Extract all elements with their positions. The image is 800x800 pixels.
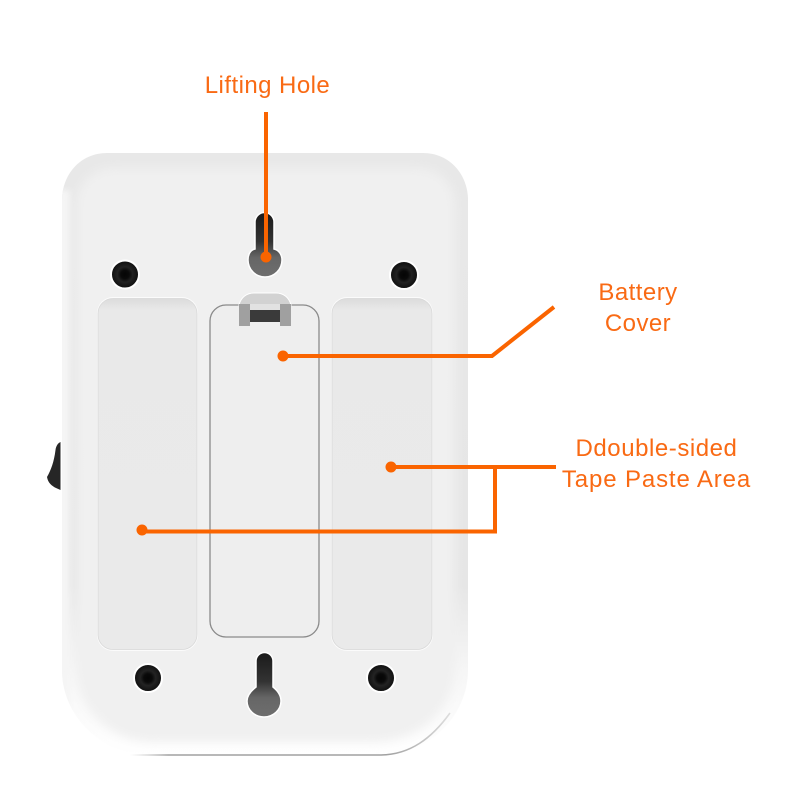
side switch (47, 442, 60, 490)
label: battery cover: Cover (605, 310, 671, 337)
screw hole: top right (390, 261, 418, 289)
label: battery cover: Battery (598, 279, 678, 306)
leader: lifting hole (260, 112, 272, 262)
device body (62, 153, 468, 756)
battery cover latch (239, 293, 291, 326)
infographic canvas (47, 76, 750, 756)
bottom keyhole (247, 652, 281, 717)
screw hole: bottom right (367, 664, 395, 692)
label: double-sided tape paste area: Ddouble-sided (576, 435, 737, 462)
screw hole: bottom left (134, 664, 162, 692)
label: double-sided tape paste area: Tape Paste Area (562, 466, 751, 493)
leader: battery cover (278, 307, 554, 362)
left tape area (97, 297, 198, 651)
leader: tape paste area (136, 462, 556, 536)
label: lifting hole: Lifting Hole (205, 72, 330, 99)
screw hole: top left (111, 260, 139, 288)
battery cover (210, 293, 319, 637)
right tape area (331, 297, 433, 651)
top keyhole: lifting hole (248, 212, 282, 277)
